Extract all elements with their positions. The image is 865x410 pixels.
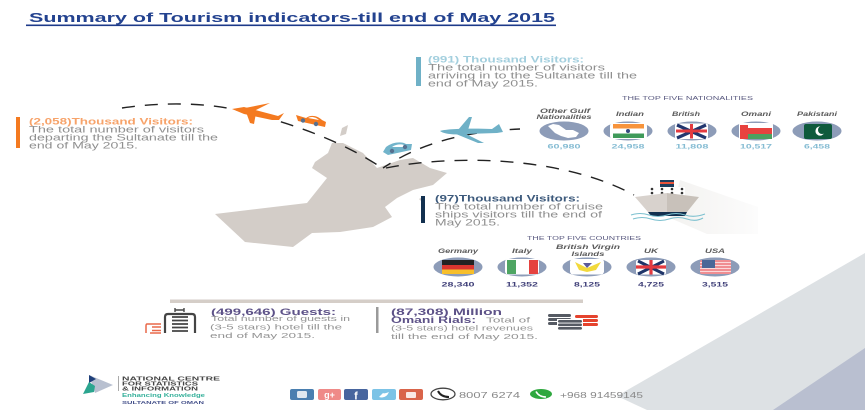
- country: italy: Italy: [512, 249, 533, 255]
- country: uk: UK: [644, 249, 659, 255]
- departures callout: (2,058)Thousand Visitors:: [29, 116, 193, 128]
- logo: national centre: Enhancing Knowledge: [122, 393, 205, 399]
- icon: cruise ship: [631, 180, 758, 234]
- nationality: omani: 10,517: [740, 144, 773, 150]
- background triangle: light: [617, 253, 865, 410]
- country: british virgin islands: Islands: [572, 252, 606, 258]
- icon: hotel: [146, 308, 195, 333]
- nationality: indian: Indian: [616, 112, 645, 118]
- arrivals callout: [416, 54, 637, 88]
- phone contact: 8007 6274: [459, 390, 520, 400]
- logo: national centre: & INFORMATION: [122, 386, 198, 392]
- revenue callout: Omani Rials:: [391, 315, 476, 326]
- nationality: indian: [604, 112, 652, 150]
- nationality: other gulf: Nationalities: [536, 115, 593, 121]
- country: uk: [626, 249, 676, 288]
- departures callout: [16, 116, 218, 150]
- logo: national centre: NATIONAL CENTRE: [122, 376, 221, 382]
- nationality: omani: Omani: [741, 112, 772, 118]
- country: usa: USA: [705, 249, 725, 255]
- icon: blue car: [383, 142, 412, 155]
- guests callout: Total number of guests in: [211, 314, 350, 323]
- nationality: british: British: [672, 112, 700, 118]
- heading: top five nationalities: THE TOP FIVE NATIONALITIES: [622, 96, 754, 102]
- nationality: pakistani: 6,458: [804, 144, 831, 150]
- country: usa: [690, 249, 740, 288]
- cruise callout: May 2015.: [435, 218, 500, 228]
- nationality: other gulf: Other Gulf: [540, 109, 592, 115]
- guests callout: (3-5 stars) hotel till the: [210, 322, 342, 332]
- country: germany: [434, 249, 482, 288]
- dashed route: departures: [122, 104, 382, 168]
- guests callout: end of May 2015.: [210, 331, 315, 340]
- social icons: g+: [324, 390, 335, 400]
- arrivals callout: end of May 2015.: [428, 78, 538, 88]
- dashed route: arrivals: [383, 129, 520, 168]
- cruise callout: The total number of cruise: [435, 202, 603, 212]
- revenue callout: [391, 307, 538, 341]
- cruise callout: (97)Thousand Visitors:: [435, 194, 580, 204]
- icon: coins: [548, 314, 598, 330]
- departures callout: departing the Sultanate till the: [29, 132, 218, 142]
- departures callout: end of May 2015.: [29, 140, 138, 150]
- revenue callout: Total of: [486, 316, 532, 324]
- nationality: omani: [732, 112, 780, 150]
- logo: national centre: FOR STATISTICS: [122, 382, 199, 388]
- social icons: [290, 389, 423, 402]
- title: Summary of Tourism indicators-till end of May 2015: [29, 10, 555, 25]
- icon: orange plane: [232, 103, 284, 124]
- icon: blue plane: [440, 117, 503, 143]
- country: germany: 28,340: [442, 282, 475, 288]
- country: uk: 4,725: [638, 282, 665, 288]
- country: british virgin islands: 8,125: [574, 282, 601, 288]
- logo: national centre: [83, 375, 221, 405]
- nationality: british: [668, 112, 716, 150]
- revenue callout: (3-5 stars) hotel revenues: [391, 324, 533, 332]
- guests callout: (499,646) Guests:: [211, 307, 336, 318]
- whatsapp contact: [530, 389, 643, 400]
- divider bar: [170, 300, 583, 303]
- icon: orange car: [296, 115, 326, 127]
- nationality: other gulf: 60,980: [548, 144, 581, 150]
- cruise callout: ships visitors till the end of: [435, 210, 603, 220]
- country: italy: [498, 249, 546, 288]
- background triangle: dark: [773, 348, 865, 410]
- arrivals callout: (991) Thousand Visitors:: [428, 54, 584, 66]
- heading: top five countries: THE TOP FIVE COUNTRIES: [527, 236, 642, 242]
- revenue callout: (87,308) Million: [391, 307, 502, 318]
- guests callout: [210, 307, 350, 340]
- phone contact: [431, 388, 520, 400]
- nationality: indian: 24,958: [612, 144, 645, 150]
- country: usa: 3,515: [702, 282, 729, 288]
- departures callout: The total number of visitors: [29, 124, 205, 134]
- country: italy: 11,352: [506, 282, 539, 288]
- nationality: pakistani: Pakistani: [797, 112, 837, 118]
- country: germany: Germany: [438, 249, 479, 255]
- nationality: other gulf: [536, 109, 593, 150]
- logo: national centre: SULTANATE OF OMAN: [122, 400, 204, 405]
- arrivals callout: arriving in to the Sultanate till the: [428, 70, 637, 80]
- whatsapp contact: +968 91459145: [560, 390, 643, 400]
- revenue callout: till the end of May 2015.: [391, 332, 538, 341]
- vertical divider: [376, 307, 378, 333]
- social icons: f: [354, 390, 358, 402]
- arrivals callout: The total number of visitors: [428, 62, 606, 72]
- country: british virgin islands: British Virgin: [556, 245, 621, 251]
- nationality: british: 11,808: [676, 144, 709, 150]
- cruise callout: [421, 194, 603, 228]
- nationality: pakistani: [792, 112, 842, 150]
- map of Oman: [215, 125, 447, 247]
- dashed route: cruise: [386, 160, 634, 195]
- country: british virgin islands: [556, 245, 621, 288]
